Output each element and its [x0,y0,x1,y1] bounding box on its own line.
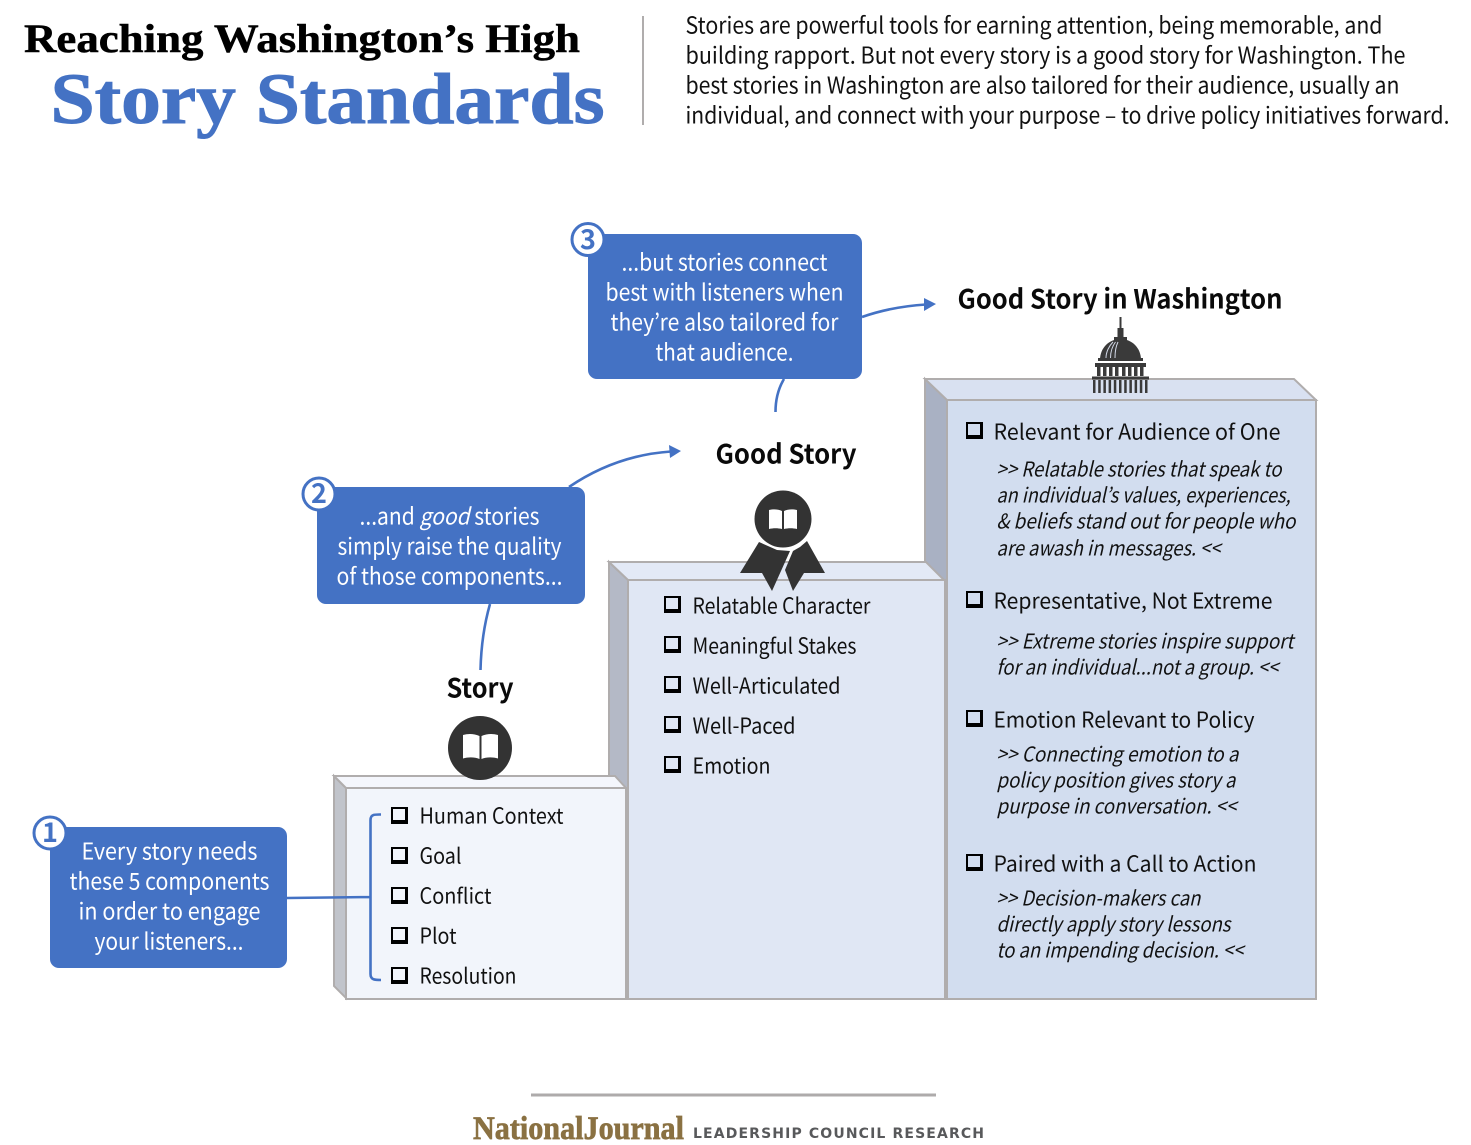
title [24,16,604,139]
good story checklist: Well-Articulated [692,669,840,700]
good story checklist: Relatable Character [692,589,871,620]
callout 2: simply raise the quality [338,527,562,561]
arrow: callout 3 to Washington [862,298,936,317]
callout 2: of those components... [336,557,562,591]
heading: good story in Washington: Good Story in Washington [958,277,1282,316]
Washington checklist: Representative, Not Extreme [994,584,1272,615]
Washington checklist: Paired with a Call to Action [994,847,1256,878]
callout 3: 3 [580,218,596,257]
icon: capitol dome [1092,317,1149,393]
Washington checklist: Relevant for Audience of One [994,415,1280,446]
arrow: callout 2 to good story [569,445,681,487]
good story checklist [664,589,871,780]
connector: callout 1 to story list [287,814,381,980]
Washington checklist [966,415,1297,963]
good story checklist: Emotion [692,749,770,780]
panel: good story step [609,562,945,999]
icon: book [448,716,512,780]
Washington checklist: & beliefs stand out for people who [996,504,1297,534]
icon: award ribbon with book [740,490,825,591]
Washington checklist: an individual’s values, experiences, [996,478,1290,508]
callout 1 [34,811,287,968]
callout 1: these 5 components [70,862,270,896]
Washington checklist: Emotion Relevant to Policy [994,703,1254,734]
Washington checklist: >> Decision-makers can [996,881,1202,911]
callout 2: ...and good stories [360,497,540,531]
story checklist: Plot [420,919,456,950]
panel: good story in Washington step [925,379,1316,999]
panel: story step [334,776,626,999]
intro paragraph: Stories are powerful tools for earning attention, being memorable, and [686,6,1382,40]
footer logo [473,1111,984,1145]
good story checklist: Well-Paced [692,709,796,740]
footer logo: LEADERSHIP COUNCIL RESEARCH [693,1126,984,1142]
Washington checklist: >> Extreme stories inspire support [996,624,1296,654]
callout 1: Every story needs [82,832,258,866]
title line one: Reaching Washington’s High [24,16,580,61]
callout 1: your listeners... [94,922,244,956]
story checklist: Human Context [420,799,564,830]
story checklist: Goal [420,839,462,870]
Washington checklist: are awash in messages. << [996,531,1223,561]
heading: good story: Good Story [716,432,856,471]
callout 2 [303,472,585,604]
callout 3 [572,218,862,379]
callout 3: they’re also tailored for [610,303,839,337]
Washington checklist: >> Relatable stories that speak to [996,452,1283,482]
intro paragraph [686,6,1450,130]
Washington checklist: policy position gives story a [996,763,1237,793]
intro paragraph: best stories in Washington are also tailored for their audience, usually an [686,66,1400,100]
heading: story: Story [446,666,514,705]
callout 2: 2 [311,472,327,511]
callout 3: best with listeners when [606,273,844,307]
good story checklist: Meaningful Stakes [692,629,856,660]
callout 1: in order to engage [78,892,260,926]
title line two: Story Standards [50,59,604,139]
story checklist: Resolution [420,959,516,990]
connector: callout 3 to good story [776,379,784,412]
intro paragraph: building rapport. But not every story is a good story for Washington. The [686,36,1406,70]
story checklist [391,799,564,990]
Washington checklist: to an impending decision. << [996,933,1246,963]
story checklist: Conflict [420,879,492,910]
Washington checklist: directly apply story lessons [996,907,1233,937]
connector: callout 2 to story [480,604,490,670]
Washington checklist: >> Connecting emotion to a [996,737,1240,767]
callout 1: 1 [42,811,58,850]
callout 3: ...but stories connect [622,243,828,277]
callout 3: that audience. [656,333,794,367]
Washington checklist: purpose in conversation. << [996,789,1239,819]
Washington checklist: for an individual...not a group. << [996,650,1281,680]
